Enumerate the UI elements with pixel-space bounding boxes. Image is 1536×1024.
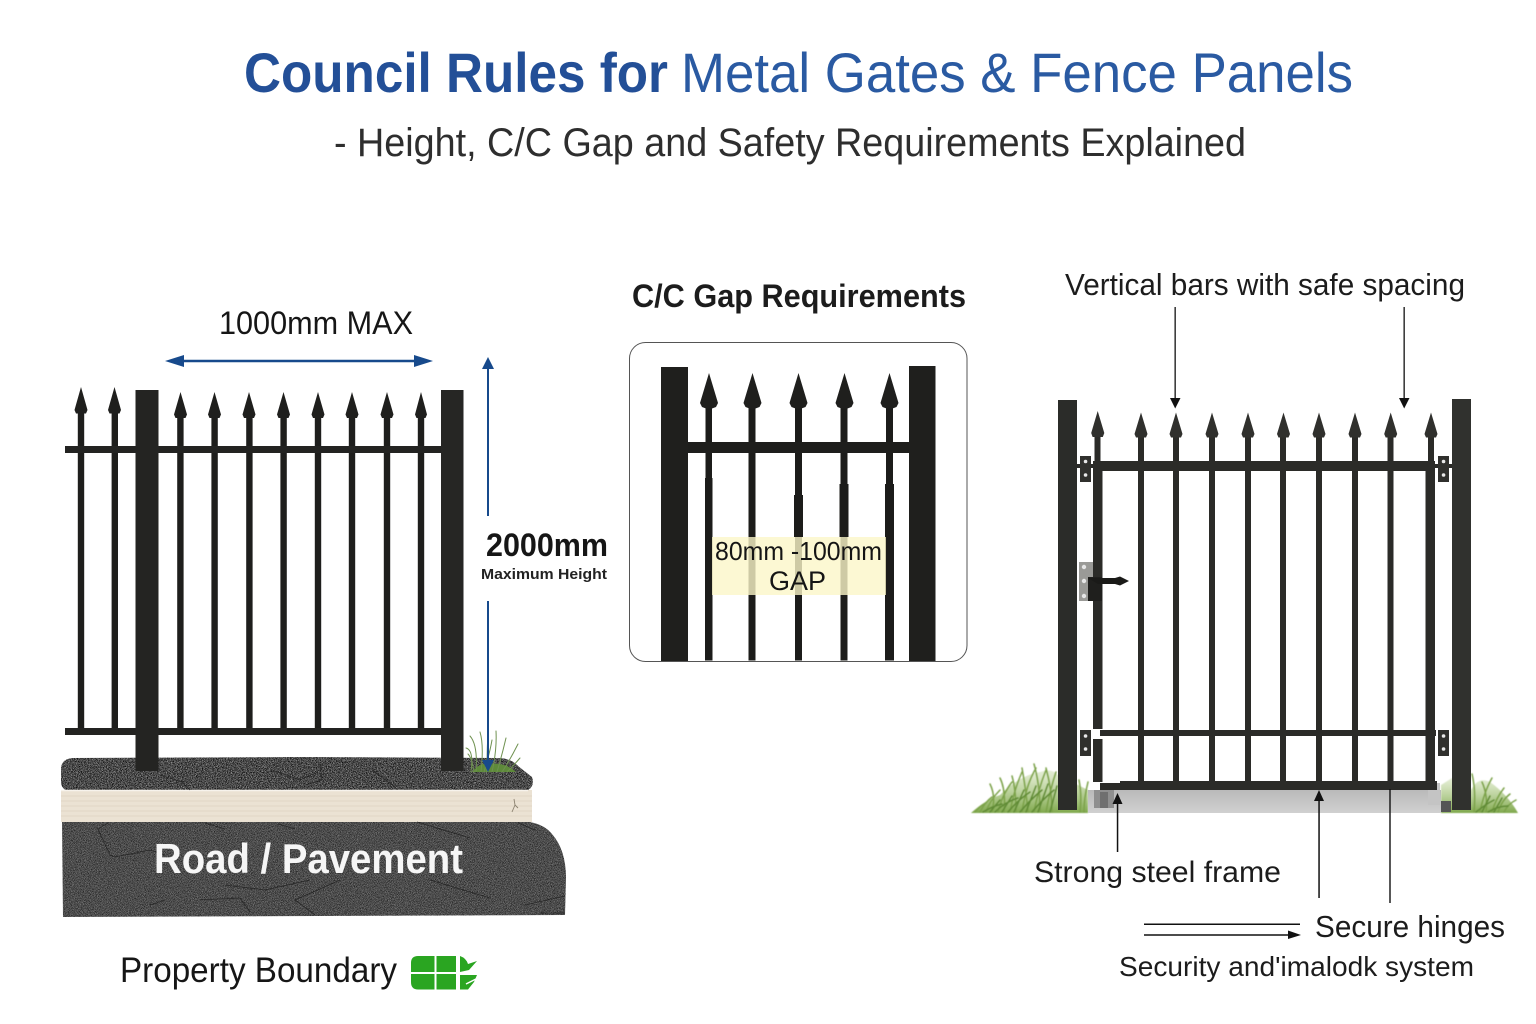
panel: fence elevation with dimensions: [61, 305, 608, 917]
gate rails: [1077, 461, 1452, 790]
latch: [1079, 562, 1129, 601]
gate post right: [1452, 399, 1471, 810]
subtitle: - Height, C/C Gap and Safety Requirements Explained: [334, 121, 1246, 165]
pavement: kerb band: [61, 790, 532, 822]
detail post left: [661, 367, 688, 661]
arrow: height upper segment: [482, 357, 494, 516]
detail bars: [705, 408, 894, 660]
grass right: [1441, 774, 1518, 813]
callout: security system: Security and'imalodk system: [1119, 951, 1474, 982]
width label: 1000mm MAX: [219, 305, 413, 341]
arrow: strong steel frame: [1112, 793, 1122, 852]
title: Council Rules for: [244, 41, 668, 104]
title: Metal Gates & Fence Panels: [681, 41, 1353, 104]
height caption: Maximum Height: [481, 567, 607, 583]
gap highlight: [712, 537, 886, 595]
gate stiles: [1093, 471, 1435, 782]
arrow: height lower segment: [482, 601, 494, 772]
height value: 2000mm: [486, 527, 608, 563]
panel: gate with callouts: [971, 267, 1518, 982]
pavement cracks: [98, 763, 565, 915]
concrete base: [1088, 783, 1451, 813]
detail spears: [700, 373, 898, 408]
gap label line 1: 80mm -100mm: [715, 536, 882, 566]
panel frame: [630, 342, 967, 662]
fence post right: [441, 390, 464, 771]
arrow: double lines: [1144, 924, 1301, 939]
pavement: lower asphalt block: [62, 822, 566, 917]
fence bars: [78, 413, 424, 728]
arrow: vertical bars right: [1399, 307, 1410, 408]
callout: vertical bars: Vertical bars with safe spacing: [1065, 267, 1465, 302]
fence spears: [74, 387, 427, 418]
section heading: C/C gap: C/C Gap Requirements: [632, 278, 966, 314]
fence post left: [136, 390, 158, 771]
callout: strong steel frame: Strong steel frame: [1034, 856, 1281, 889]
gate bars: [1094, 437, 1434, 781]
grass left: [971, 764, 1088, 813]
arrow: centre callout: [1314, 790, 1324, 898]
grass tuft: [466, 731, 520, 772]
callout: secure hinges: Secure hinges: [1315, 909, 1505, 944]
hinges: [1080, 456, 1449, 756]
arrow: vertical bars left: [1170, 307, 1180, 408]
arrow: 1000mm width: [165, 355, 433, 367]
icon: property boundary: [411, 956, 477, 990]
gate post left: [1058, 400, 1077, 810]
pavement: upper asphalt slab: [61, 757, 533, 790]
property boundary label: Property Boundary: [120, 951, 397, 990]
detail rail: [688, 442, 909, 453]
fence rails: [65, 446, 441, 735]
gate spears: [1091, 411, 1438, 438]
title: [244, 41, 1353, 104]
detail post right: [909, 366, 936, 661]
gap label line 2: GAP: [769, 566, 826, 596]
line: hinge callout: [1389, 789, 1391, 903]
panel: C/C gap detail: [630, 342, 967, 662]
pavement label: Road / Pavement: [154, 835, 463, 882]
